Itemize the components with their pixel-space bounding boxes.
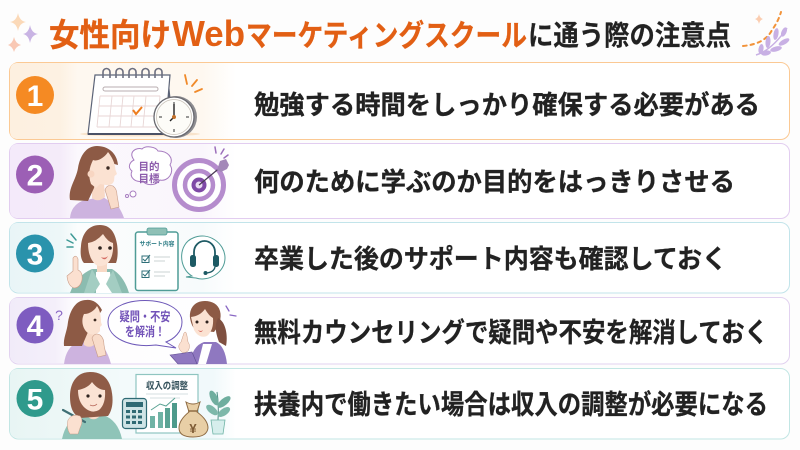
question mark: ? [55, 307, 63, 323]
badge 1: 1 [27, 80, 43, 113]
document with chart [136, 374, 198, 433]
illustration: counselor right [170, 301, 236, 364]
badge 1 [16, 76, 54, 114]
thought bubble: 目標 [138, 172, 160, 185]
badge 3 [16, 234, 54, 272]
text 1: 勉強する時間をしっかり確保する必要がある [254, 90, 760, 120]
badge 5: 5 [27, 384, 43, 416]
icon: plant [204, 389, 232, 434]
icon: money bag: ¥ [189, 421, 197, 436]
speech bubble: を解消！ [125, 324, 165, 339]
decoration: sparkles left [8, 13, 38, 52]
illustration: woman pointing [67, 225, 129, 293]
title: 女性向け [49, 17, 171, 53]
panel 2: purpose [10, 144, 790, 218]
speech bubble: 疑問・不安 [120, 309, 170, 324]
illustration: thinking woman [70, 146, 124, 218]
badge 4 [16, 306, 54, 344]
panel 3: support [10, 222, 790, 293]
title: Web [172, 13, 245, 54]
badge 3: 3 [27, 238, 43, 272]
icon: calendar with clock [80, 69, 202, 138]
text 3: 卒業した後のサポート内容も確認しておく [254, 244, 727, 274]
decoration: dotted curve and lavender sprig [743, 12, 790, 56]
icon: target with arrow [172, 147, 229, 212]
title [49, 13, 731, 54]
title: マーケティングスクール [246, 20, 527, 53]
title: に通う際の注意点 [528, 20, 731, 51]
badge 4: 4 [27, 310, 44, 343]
icon: money bag [179, 402, 208, 437]
icon: clipboard: サポート内容 [140, 240, 174, 248]
panel 5: income [10, 368, 790, 439]
badge 2: 2 [27, 160, 43, 192]
badge 2 [16, 156, 54, 194]
icon: clipboard [136, 228, 178, 290]
speech bubble [108, 300, 182, 348]
thought bubble: 目的 [138, 160, 160, 173]
panel 4: counseling [10, 298, 790, 364]
panel 1: study time [10, 62, 790, 140]
document with chart: 収入の調整 [146, 380, 188, 392]
icon: headset bubble [182, 236, 225, 279]
badge 5 [16, 380, 54, 417]
illustration: woman thinking left [64, 300, 111, 364]
icon: calculator [122, 398, 146, 428]
text 2: 何のために学ぶのか目的をはっきりさせる [254, 167, 735, 197]
illustration: woman with pen [62, 372, 122, 439]
thought bubble [126, 147, 172, 198]
